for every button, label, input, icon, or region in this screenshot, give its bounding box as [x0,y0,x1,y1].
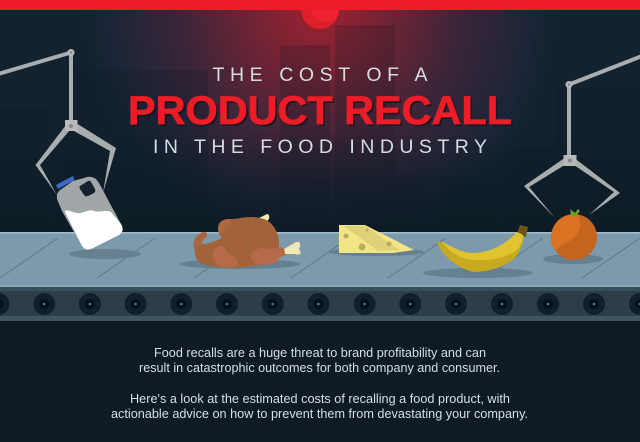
paragraph 2 [111,391,528,421]
jug cap [56,176,74,189]
banana inner [441,232,523,260]
drumstick bone [284,242,301,255]
head lump [218,219,231,233]
title line 1: THE COST OF A [212,64,428,86]
milk [64,210,123,250]
banana outer [437,232,523,272]
shadow [180,259,300,269]
banana [423,225,533,278]
wing [213,246,238,268]
paragraph 1 [139,345,500,375]
cheese holes [344,228,392,250]
shadow [328,248,424,256]
orange fruit [551,214,597,260]
orange leaf [570,209,580,217]
roast turkey [180,214,301,269]
turkey neck [194,232,207,251]
milk jug [56,176,141,259]
right robotic arm [524,56,640,218]
shadow [423,268,533,278]
left robotic arm [0,49,116,195]
banana stem [517,225,528,237]
conveyor belt [0,232,640,442]
drumstick joint [281,248,286,256]
title line 3: IN THE FOOD INDUSTRY [153,136,487,158]
thigh [251,247,284,265]
jug body [57,177,123,250]
title [128,64,514,158]
conveyor rollers [0,293,640,315]
orange highlight [551,214,580,251]
cheese top [344,226,400,251]
turkey body [195,217,279,268]
title line 2: PRODUCT RECALL [130,91,514,135]
orange [543,209,603,264]
title line 2: PRODUCT RECALL [128,89,512,133]
shadow [69,249,141,259]
paragraph 1: result in catastrophic outcomes for both company and consumer. [139,360,500,375]
top red bar [0,0,640,29]
top bone [257,214,269,222]
cheese wedge [328,225,424,256]
paragraph 1: Food recalls are a huge threat to brand profitability and can [154,345,486,360]
intro text [111,345,528,421]
shadow [543,254,603,264]
paragraph 2: Here's a look at the estimated costs of recalling a food product, with [130,391,510,406]
cheese front [339,225,414,253]
paragraph 2: actionable advice on how to prevent them from devastating your company. [111,406,528,421]
handle hole [80,181,95,196]
